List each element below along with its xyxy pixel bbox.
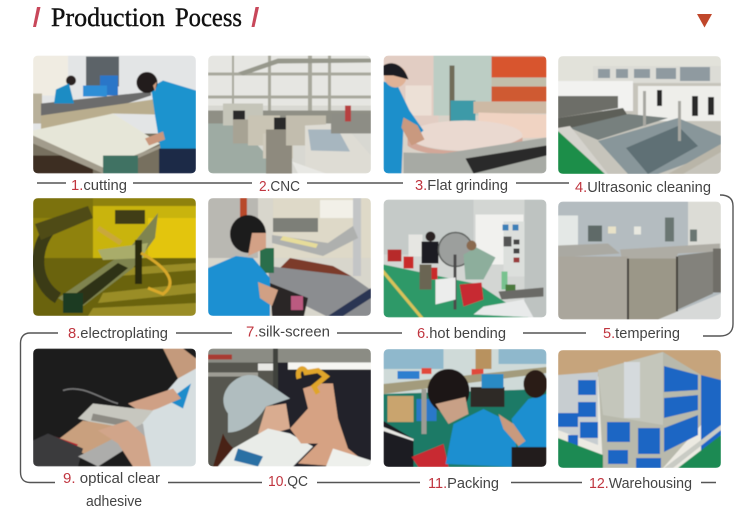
title: Pocess: [175, 3, 242, 32]
label 6: 6.hot bending: [417, 326, 506, 342]
label 9 second line: adhesive: [86, 494, 142, 510]
title: [33, 3, 259, 32]
photo: tempering: [558, 202, 721, 320]
label 11: 11.Packing: [428, 476, 499, 492]
title: Production: [51, 3, 165, 32]
label 9: 9. optical clear: [63, 471, 160, 487]
label 12: 12.Warehousing: [589, 476, 692, 492]
photo: hot bending: [384, 200, 546, 318]
photo: optical clear adhesive: [33, 348, 196, 466]
icon: down arrow: [697, 14, 712, 28]
photo: packing: [384, 349, 548, 467]
photo: flat grinding: [384, 56, 546, 174]
label 10: 10.QC: [268, 474, 308, 490]
photo: QC: [208, 348, 371, 466]
photo: warehousing: [558, 350, 721, 468]
label 4: 4.Ultrasonic cleaning: [575, 180, 711, 196]
label 1: 1.cutting: [71, 178, 127, 194]
label 8: 8.electroplating: [68, 326, 168, 342]
label 5: 5.tempering: [603, 326, 680, 342]
photo: ultrasonic cleaning: [558, 56, 721, 174]
label 7: 7.silk-screen: [246, 324, 330, 340]
photo: silk-screen: [208, 198, 371, 316]
label 3: 3.Flat grinding: [415, 178, 508, 194]
step labels: [63, 178, 711, 510]
flow line connectors: [20, 183, 733, 482]
photo: electroplating: [33, 198, 196, 316]
photo: CNC: [208, 56, 371, 174]
photo: cutting: [33, 56, 196, 174]
label 2: 2.CNC: [259, 179, 300, 195]
